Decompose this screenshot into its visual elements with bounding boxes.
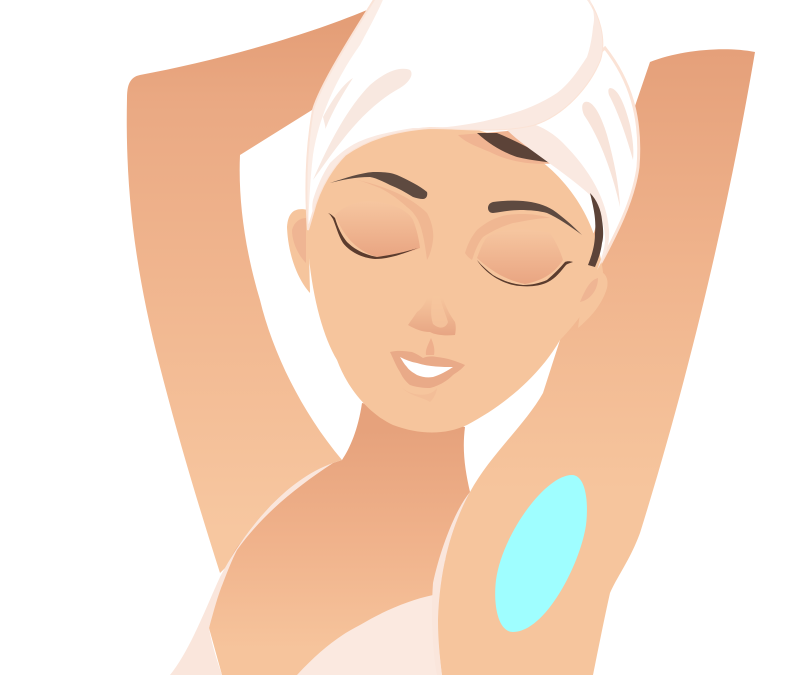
- towel top: [306, 0, 602, 230]
- garment: [297, 595, 442, 675]
- left arm: [127, 10, 367, 573]
- towel left fold small: [323, 78, 353, 130]
- eyebrow left: [330, 172, 427, 199]
- chin shadow: [402, 388, 437, 402]
- right arm: [438, 49, 755, 675]
- hair strand: [588, 193, 603, 267]
- hair fringe: [458, 130, 557, 164]
- ear left: [287, 209, 310, 293]
- philtrum: [426, 338, 434, 355]
- neck and chest: [209, 403, 470, 675]
- towel lower band: [507, 124, 609, 270]
- towel left edge band: [306, 0, 385, 230]
- towel left fold large: [313, 69, 412, 180]
- face: [307, 126, 603, 432]
- eye left: [328, 180, 433, 260]
- lips: [390, 351, 465, 388]
- towel back: [520, 48, 639, 270]
- eye right: [465, 214, 573, 286]
- eyebrow right: [488, 201, 582, 235]
- arm fold highlight: [432, 492, 470, 675]
- ear right: [578, 270, 608, 328]
- towel fold band: [312, 0, 602, 213]
- underarm patch: [495, 475, 587, 632]
- strap: [170, 463, 333, 675]
- towel back folds: [582, 88, 633, 207]
- nose: [408, 296, 456, 335]
